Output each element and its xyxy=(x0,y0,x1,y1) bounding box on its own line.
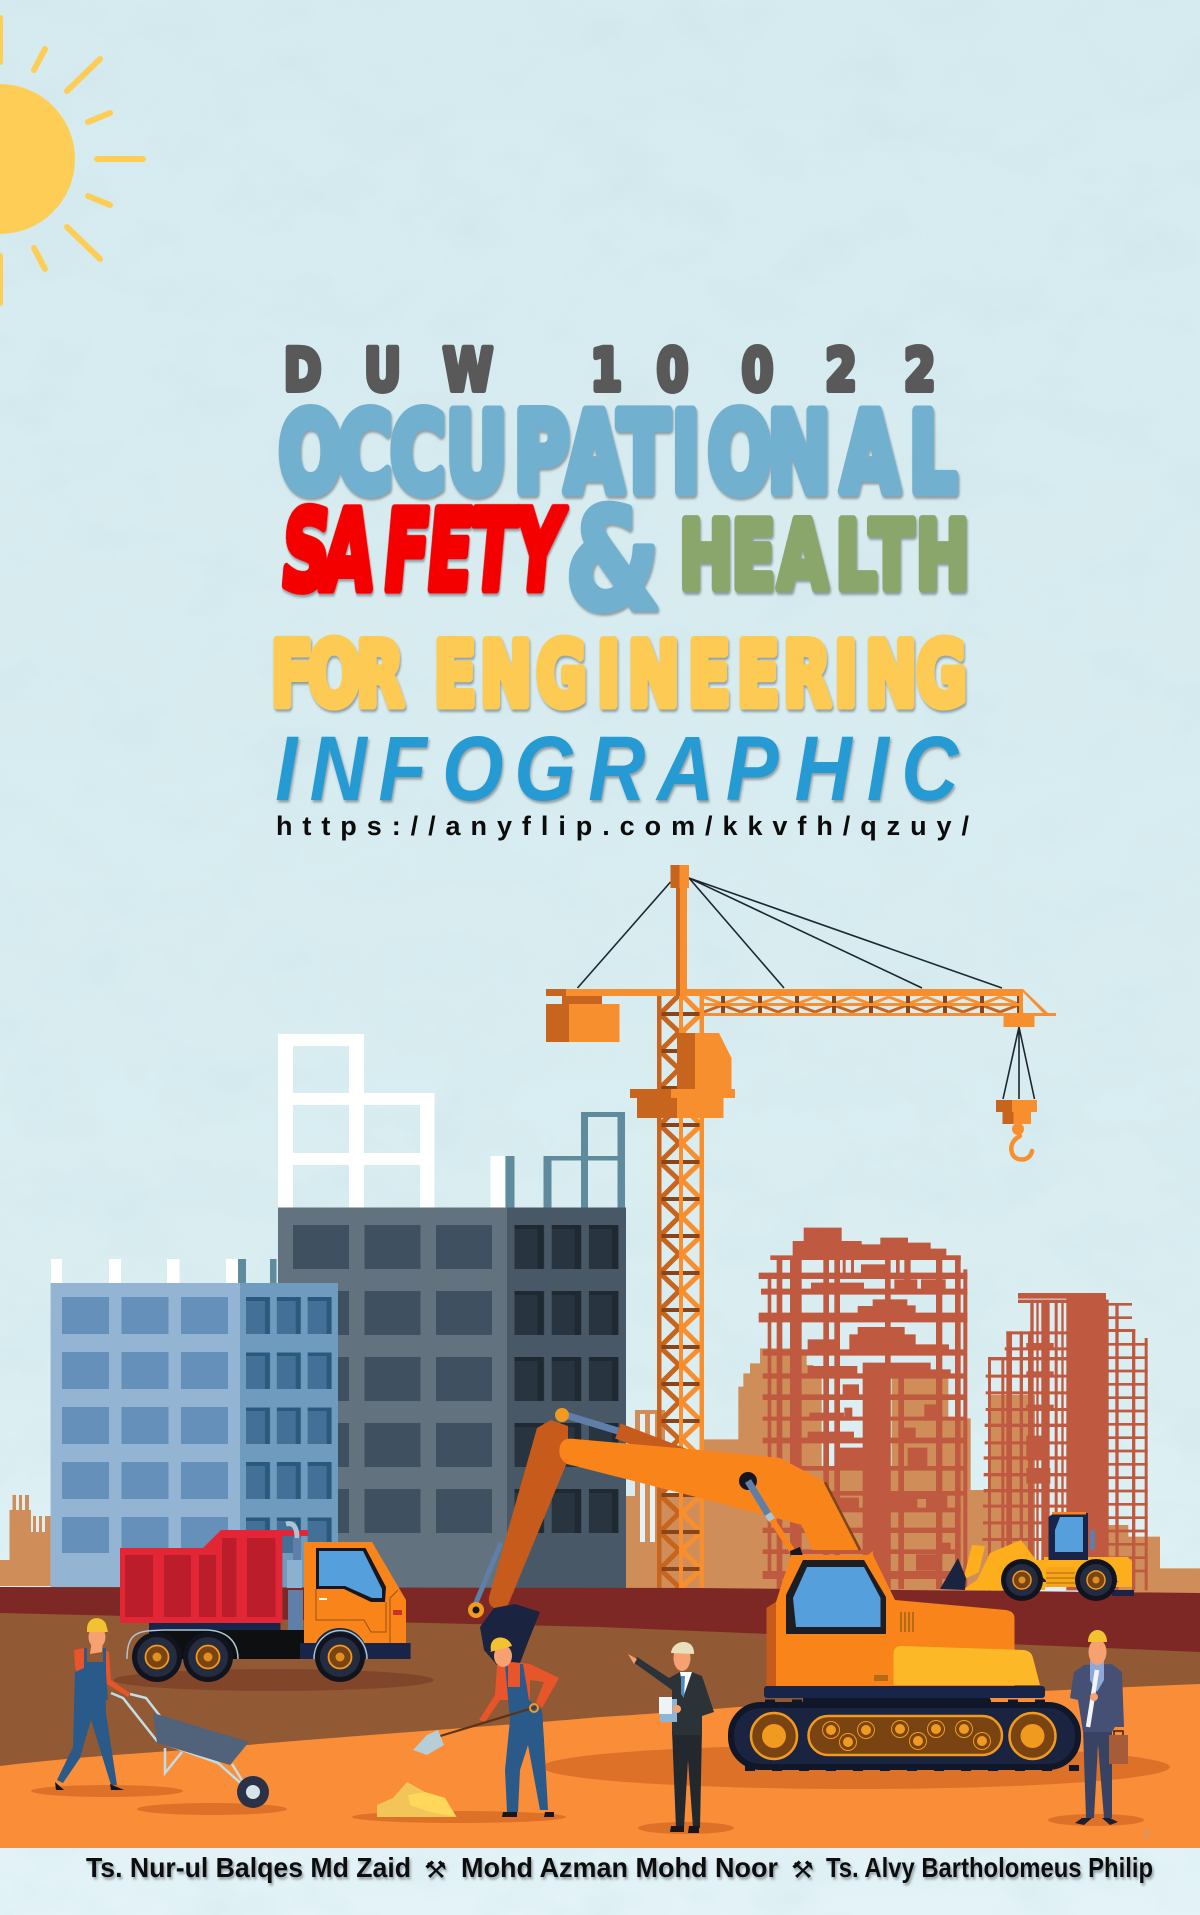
title block xyxy=(271,338,969,841)
site manager with blueprint and briefcase xyxy=(1070,1630,1128,1825)
red scaffolding tower, left xyxy=(759,1228,967,1588)
excavator bucket xyxy=(468,1602,540,1665)
heading: safety: SAFETY xyxy=(277,489,569,616)
crane hook xyxy=(996,1100,1037,1160)
truck cab xyxy=(300,1542,411,1659)
icon: sand pile xyxy=(377,1782,456,1817)
page number: 1 xyxy=(1143,1828,1149,1840)
truck wheels xyxy=(132,1632,365,1682)
tower crane xyxy=(546,865,1056,1590)
ground: road band, dirt and foreground xyxy=(0,1587,1200,1848)
excavator shadow rod and stick xyxy=(475,1408,748,1609)
red scaffolding tower, right xyxy=(983,1293,1147,1590)
background skyline: tan silhouettes xyxy=(0,1348,1200,1597)
crane cables xyxy=(578,878,1034,1099)
worker with wheelbarrow xyxy=(55,1618,269,1808)
truck exhaust xyxy=(286,1524,303,1630)
heading: health: HEALTH xyxy=(679,500,969,610)
blue building xyxy=(51,1283,338,1588)
site engineer with clipboard xyxy=(628,1642,714,1833)
heading: ampersand: & xyxy=(565,478,660,641)
heading: infographic: INFOGRAPHIC xyxy=(275,717,959,820)
excavator boom xyxy=(559,1439,860,1550)
heading: for engineering: FORENGINEERING xyxy=(271,624,967,726)
icon: tools: ⚒ xyxy=(424,1856,447,1884)
excavator hydraulic xyxy=(739,1472,803,1564)
wheel loader xyxy=(940,1512,1134,1601)
crane cabin and platform xyxy=(630,1033,735,1118)
icon: sun xyxy=(0,18,143,303)
icon: tools: ⚒ xyxy=(791,1856,814,1884)
truck wheel arches xyxy=(127,1630,367,1659)
footer: author names: Ts. Nur-ul Balqes Md Zaid xyxy=(86,1852,411,1883)
footer: author names xyxy=(86,1852,1153,1884)
excavator body xyxy=(764,1551,1045,1708)
excavator track xyxy=(731,1702,1095,1768)
dump truck xyxy=(120,1524,411,1682)
crane mast lattice xyxy=(657,996,704,1590)
grey building xyxy=(278,1208,626,1592)
worker with shovel xyxy=(413,1638,559,1817)
wheelbarrow xyxy=(111,1693,269,1808)
footer: author names: Ts. Alvy Bartholomeus Philip xyxy=(826,1852,1153,1883)
link: url: https://anyflip.com/kkvfh/qzuy/ xyxy=(276,811,969,841)
frames above the buildings xyxy=(51,1034,625,1283)
ground shadows xyxy=(31,1669,1170,1834)
heading: occupational: OCCUPATIONAL xyxy=(279,390,957,518)
footer: author names: Mohd Azman Mohd Noor xyxy=(461,1852,778,1883)
crane counterweight xyxy=(546,996,620,1042)
heading: course code: DUW10022 xyxy=(284,338,935,404)
crane jib xyxy=(546,989,1056,1027)
crane top xyxy=(670,865,689,996)
excavator xyxy=(468,1408,1095,1768)
